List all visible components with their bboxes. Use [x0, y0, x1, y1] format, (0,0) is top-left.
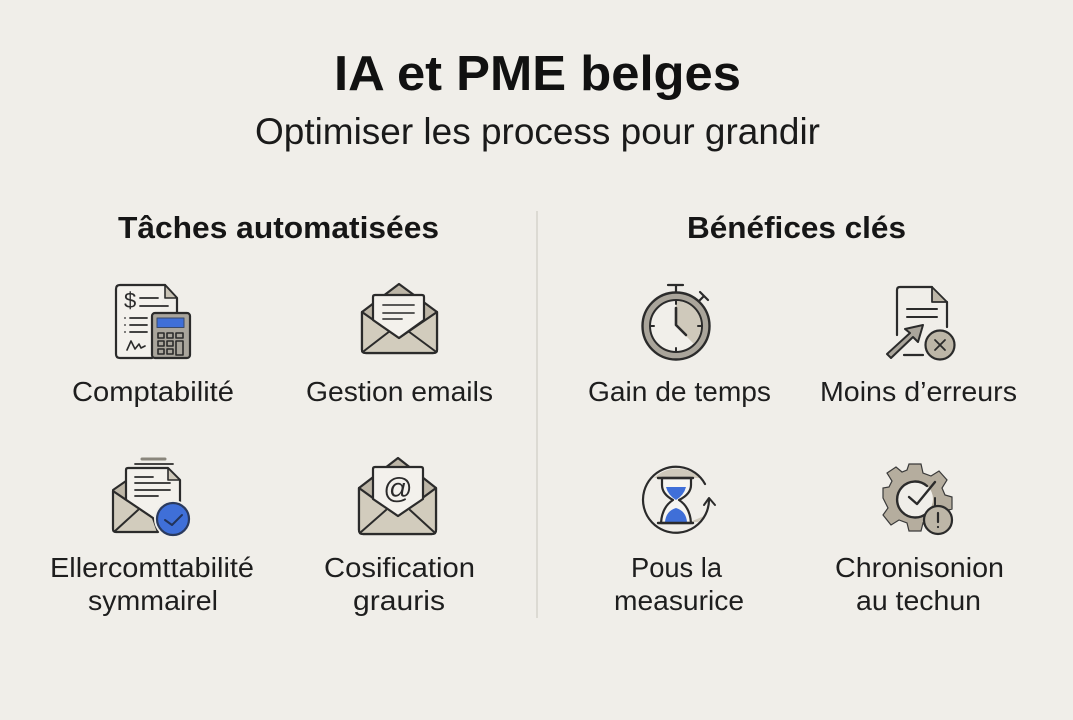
icon: document and calculator: $	[124, 288, 136, 313]
icon: stopwatch	[642, 285, 710, 360]
icon: open envelope with letter	[362, 284, 437, 353]
label: comptabilité: Comptabilité	[72, 376, 234, 407]
subtitle: Optimiser les process pour grandir	[255, 111, 820, 152]
label: ellercomttabilité symmairel: Ellercomttabilité	[50, 552, 254, 583]
icon: document and calculator	[116, 285, 190, 358]
icon: open envelope with at sign	[359, 458, 436, 534]
label: moins d'erreurs: Moins d’erreurs	[820, 376, 1017, 407]
label: ellercomttabilité symmairel: symmairel	[88, 585, 218, 616]
label: pous la measurice: measurice	[614, 585, 744, 616]
heading: tâches automatisées: Tâches automatisées	[118, 210, 439, 245]
label: gestion emails: Gestion emails	[306, 376, 493, 407]
heading: bénéfices clés: Bénéfices clés	[687, 210, 906, 245]
icon: envelope with document and check badge	[113, 459, 192, 538]
label: chronisonion au techun: Chronisonion	[835, 552, 1004, 583]
icon: open envelope with at sign: @	[383, 473, 413, 505]
label: pous la measurice: Pous la	[631, 552, 723, 583]
label: gain de temps: Gain de temps	[588, 376, 771, 407]
label: chronisonion au techun: au techun	[856, 585, 981, 616]
icon: gear with check and warning	[883, 464, 952, 534]
icon: document with arrow and cross	[887, 287, 954, 360]
label: cosification grauris	[324, 552, 475, 616]
label: ellercomttabilité symmairel	[50, 552, 254, 616]
icon: hourglass with circular arrow	[643, 467, 715, 533]
label: cosification grauris: Cosification	[324, 552, 475, 583]
label: pous la measurice	[614, 552, 744, 616]
title: IA et PME belges	[334, 47, 741, 101]
label: chronisonion au techun	[835, 552, 1004, 616]
label: cosification grauris: grauris	[353, 585, 445, 616]
